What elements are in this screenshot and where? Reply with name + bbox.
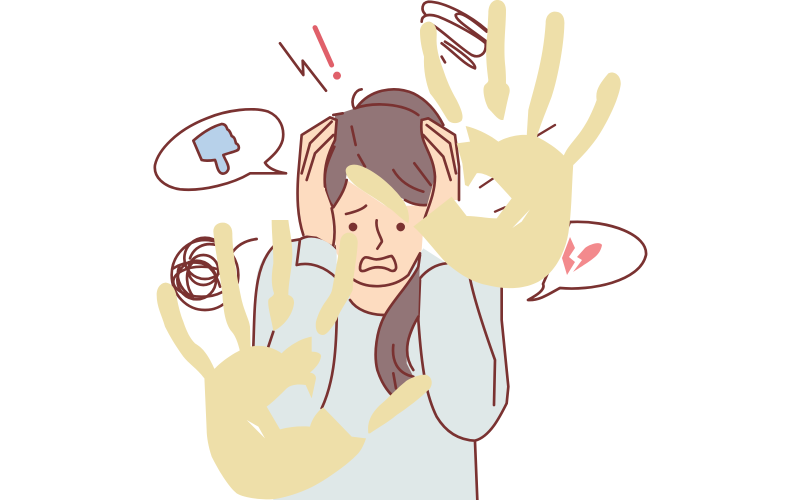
icon: tangled scribble ball bbox=[172, 238, 257, 310]
left hand bbox=[297, 117, 337, 247]
hand: lower left yellow overlay bbox=[157, 220, 432, 499]
speech bubble: broken heart bbox=[528, 222, 646, 300]
icon: scribble top right bbox=[422, 2, 487, 68]
head: hair, face and hands bbox=[280, 89, 555, 286]
hand: upper right yellow overlay bbox=[346, 0, 621, 288]
face bbox=[332, 180, 427, 286]
nose bbox=[376, 220, 382, 249]
figure: woman bbox=[253, 89, 555, 500]
eyes bbox=[349, 223, 357, 231]
dashes bbox=[280, 125, 555, 212]
icon: lightning and exclamation mark bbox=[280, 28, 341, 91]
mouth bbox=[360, 256, 396, 271]
body: sweater bbox=[253, 236, 508, 500]
speech bubble: thumbs down bbox=[155, 109, 286, 190]
hair bbox=[325, 89, 443, 207]
long hair strand bbox=[376, 255, 420, 395]
right hand bbox=[422, 118, 458, 227]
